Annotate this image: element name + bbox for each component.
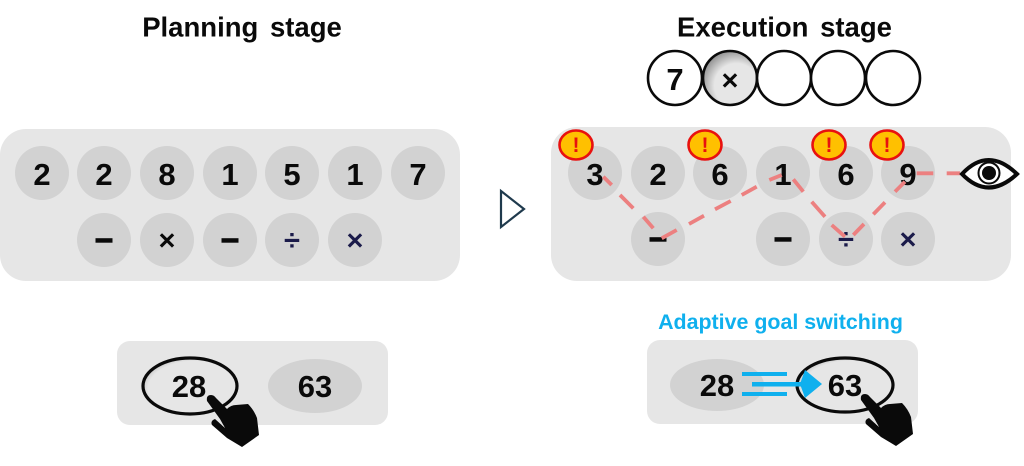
warning badges: ! [572, 134, 580, 157]
working memory slots: 7 [666, 62, 684, 97]
goal 63 [268, 359, 362, 413]
panel: execution stage tokens with gaze path [551, 127, 1017, 281]
warning badges: ! [826, 134, 832, 157]
panel: planning stage number and operator tokens [0, 129, 460, 281]
goal 28 selected [143, 358, 237, 414]
number tokens row: 1 [221, 157, 239, 192]
goal 63: 63 [298, 369, 332, 404]
number tokens row: 3 [586, 157, 604, 192]
arrow: switch goal [742, 370, 822, 398]
number tokens row: 5 [283, 157, 301, 192]
warning badges: ! [702, 134, 708, 157]
number tokens row: 6 [711, 157, 729, 192]
goal 63 selected: 63 [828, 368, 862, 403]
operator tokens row: × [900, 224, 916, 256]
goal 28 selected: 28 [172, 369, 206, 404]
heading: Execution stage: Execution stage [677, 12, 892, 42]
panel: execution goal switch [647, 340, 918, 446]
number tokens row [15, 146, 445, 200]
number tokens row: 7 [409, 157, 427, 192]
number tokens row: 1 [346, 157, 364, 192]
arrow: planning to execution [501, 191, 524, 227]
goal 63 selected [797, 358, 893, 412]
number tokens row: 8 [158, 157, 176, 192]
icon: pointing hand [861, 394, 913, 446]
number tokens row: 9 [899, 157, 917, 192]
number tokens row: 6 [837, 157, 855, 192]
operator tokens row: ÷ [838, 224, 854, 256]
icon: eye [962, 160, 1017, 188]
heading: Planning stage: Planning stage [142, 12, 342, 42]
warning badges: ! [884, 134, 890, 157]
number tokens row: 2 [33, 157, 51, 192]
operator tokens row: × [347, 225, 363, 257]
number tokens row: 1 [774, 157, 792, 192]
gaze scan path [603, 173, 960, 238]
operator tokens row: ÷ [284, 225, 300, 257]
operator tokens row: × [159, 225, 175, 257]
number tokens row [568, 146, 935, 200]
icon: pointing hand [207, 395, 259, 447]
operator tokens row [631, 212, 935, 266]
working memory slots [648, 51, 920, 105]
panel: planning goal choice [117, 341, 388, 447]
operator tokens row [77, 213, 382, 267]
warning badges [560, 130, 904, 160]
number tokens row: 2 [649, 157, 667, 192]
label: adaptive goal switching: Adaptive goal switching [658, 310, 903, 334]
goal 28 [670, 359, 764, 411]
working memory slots: × [722, 65, 738, 97]
number tokens row: 2 [95, 157, 113, 192]
goal 28: 28 [700, 368, 734, 403]
